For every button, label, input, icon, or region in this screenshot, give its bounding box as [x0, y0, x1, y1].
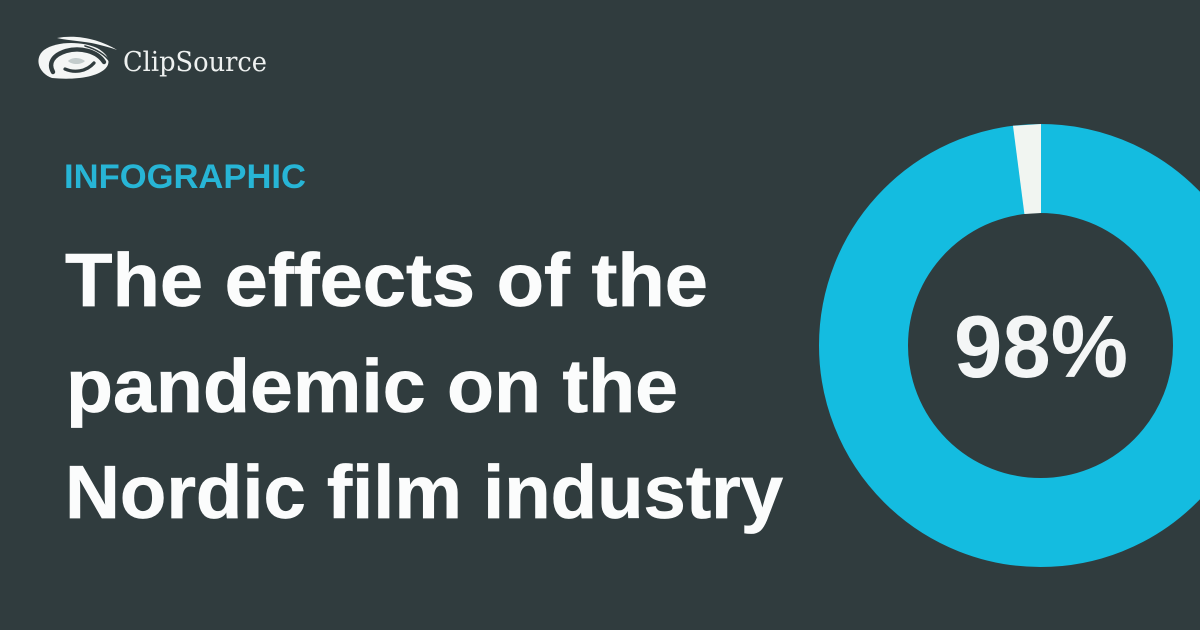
label: INFOGRAPHIC: INFOGRAPHIC [64, 158, 306, 196]
title line 2: pandemic on the [66, 344, 678, 428]
title [65, 238, 783, 534]
wordmark: ClipSource: ClipSource [123, 47, 267, 78]
logo: ClipSource [38, 37, 267, 79]
donut chart: 98% [864, 124, 1200, 522]
donut segment: 98% share [864, 168, 1200, 522]
icon: swirl logo mark [38, 37, 117, 79]
title line 1: The effects of the [65, 238, 708, 322]
title line 3: Nordic film industry [65, 450, 783, 534]
donut value: 98% [954, 297, 1128, 396]
donut segment: remaining 2% [1013, 124, 1041, 214]
